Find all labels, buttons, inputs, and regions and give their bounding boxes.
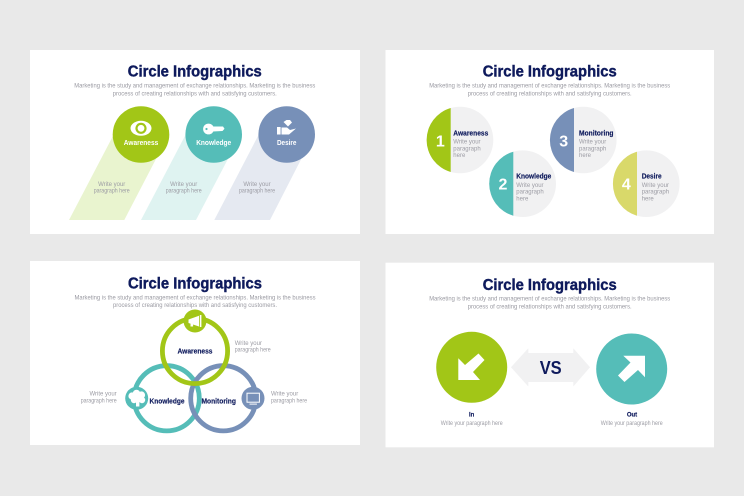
item 2: Write your <box>516 183 544 189</box>
item 3: here <box>579 153 592 159</box>
item 2: Knowledge <box>516 174 551 181</box>
item 1 <box>427 107 493 173</box>
item 2 <box>489 150 556 217</box>
text: awareness note: paragraph here <box>235 348 271 354</box>
description: Marketing is the study and management of exchange relationships. Marketing is the business <box>429 83 670 90</box>
circle: out <box>596 334 667 404</box>
text: awareness note <box>235 341 271 354</box>
item 4: 4 <box>622 176 631 194</box>
item 1: Awareness <box>453 130 488 137</box>
item 2: 2 <box>499 176 508 194</box>
text: knowledge note <box>81 392 117 404</box>
text: in <box>441 413 503 427</box>
text: teal column: Write your <box>170 182 197 188</box>
description: process of creating relationships with and satisfying customers. <box>468 90 632 97</box>
label: awareness: Awareness <box>178 348 213 355</box>
description <box>74 294 316 309</box>
double arrow: versus <box>511 348 590 386</box>
text: blue column: Write your <box>243 182 271 188</box>
green parallelogram <box>69 134 169 220</box>
text: knowledge note: Write your <box>89 392 117 398</box>
icon: monitor <box>247 393 259 405</box>
description: Marketing is the study and management of exchange relationships. Marketing is the business <box>429 296 670 303</box>
icon: eye <box>130 121 152 136</box>
icon: hand with diamond <box>277 120 296 134</box>
icon: key <box>203 124 224 134</box>
title: Circle Infographics <box>128 275 262 292</box>
circle: desire <box>258 106 315 163</box>
icon: brain <box>128 390 145 406</box>
text: monitoring note: Write your <box>271 392 298 398</box>
ring: knowledge <box>125 366 199 431</box>
item 3: Monitoring <box>579 130 614 137</box>
text: monitoring note: paragraph here <box>271 398 308 404</box>
circle: knowledge: Knowledge <box>196 140 231 147</box>
text: awareness note: Write your <box>235 341 262 347</box>
arrow: in <box>458 354 484 380</box>
item 1: 1 <box>436 134 445 151</box>
description <box>429 296 670 311</box>
icon: megaphone <box>188 315 201 327</box>
item 4: Write your <box>642 183 669 189</box>
title: Circle Infographics <box>483 277 617 294</box>
text: in: In <box>469 413 475 419</box>
circle: awareness <box>113 106 169 163</box>
text: knowledge note: paragraph here <box>81 398 117 404</box>
description <box>429 83 670 97</box>
ring: awareness <box>162 310 228 384</box>
circle: knowledge <box>185 106 242 163</box>
text: out: Out <box>627 413 637 419</box>
panel: in versus out <box>386 263 714 447</box>
text: teal column <box>166 182 202 195</box>
description: Marketing is the study and management of exchange relationships. Marketing is the business <box>74 294 316 301</box>
item 4: Desire <box>642 174 662 181</box>
title: Circle Infographics <box>483 64 617 81</box>
item 3 <box>550 107 617 173</box>
label: VS: VS <box>540 358 562 378</box>
text: out: Write your paragraph here <box>601 421 663 427</box>
description: Marketing is the study and management of exchange relationships. Marketing is the business <box>74 83 315 90</box>
item 3: Write your <box>579 140 606 146</box>
description: process of creating relationships with and satisfying customers. <box>113 302 277 309</box>
panel: interlocking rings <box>30 261 360 445</box>
item 1: Write your <box>453 140 481 146</box>
circle: in <box>436 332 507 403</box>
item 3: paragraph <box>579 146 606 152</box>
item 4 <box>613 150 680 217</box>
text: green column: paragraph here <box>94 189 130 195</box>
teal parallelogram <box>141 134 241 220</box>
item 1: here <box>453 153 466 159</box>
item 1: paragraph <box>453 146 481 152</box>
item 2: here <box>516 196 529 202</box>
item 2: paragraph <box>516 190 544 196</box>
text: green column: Write your <box>98 182 125 188</box>
label: knowledge: Knowledge <box>150 398 185 405</box>
label: monitoring: Monitoring <box>201 398 236 405</box>
text: green column <box>94 182 130 195</box>
circle: desire: Desire <box>277 140 297 147</box>
description: process of creating relationships with and satisfying customers. <box>113 90 277 97</box>
circle: awareness: Awareness <box>124 140 158 147</box>
text: in: Write your paragraph here <box>441 421 503 427</box>
arrow: out <box>618 356 645 382</box>
item 4: here <box>642 196 654 202</box>
text: monitoring note <box>271 392 308 404</box>
text: teal column: paragraph here <box>166 189 202 195</box>
item 4: paragraph <box>642 190 669 196</box>
item 3: 3 <box>559 134 568 151</box>
panel: parallelogram circles <box>30 50 360 234</box>
ring: monitoring <box>191 366 264 431</box>
blue parallelogram <box>214 134 314 220</box>
title: Circle Infographics <box>128 64 262 81</box>
panel: numbered half circles <box>386 50 714 234</box>
text: out <box>601 413 663 427</box>
text: blue column: paragraph here <box>239 189 276 195</box>
description: process of creating relationships with and satisfying customers. <box>468 304 632 311</box>
text: blue column <box>239 182 276 195</box>
description <box>74 83 315 97</box>
